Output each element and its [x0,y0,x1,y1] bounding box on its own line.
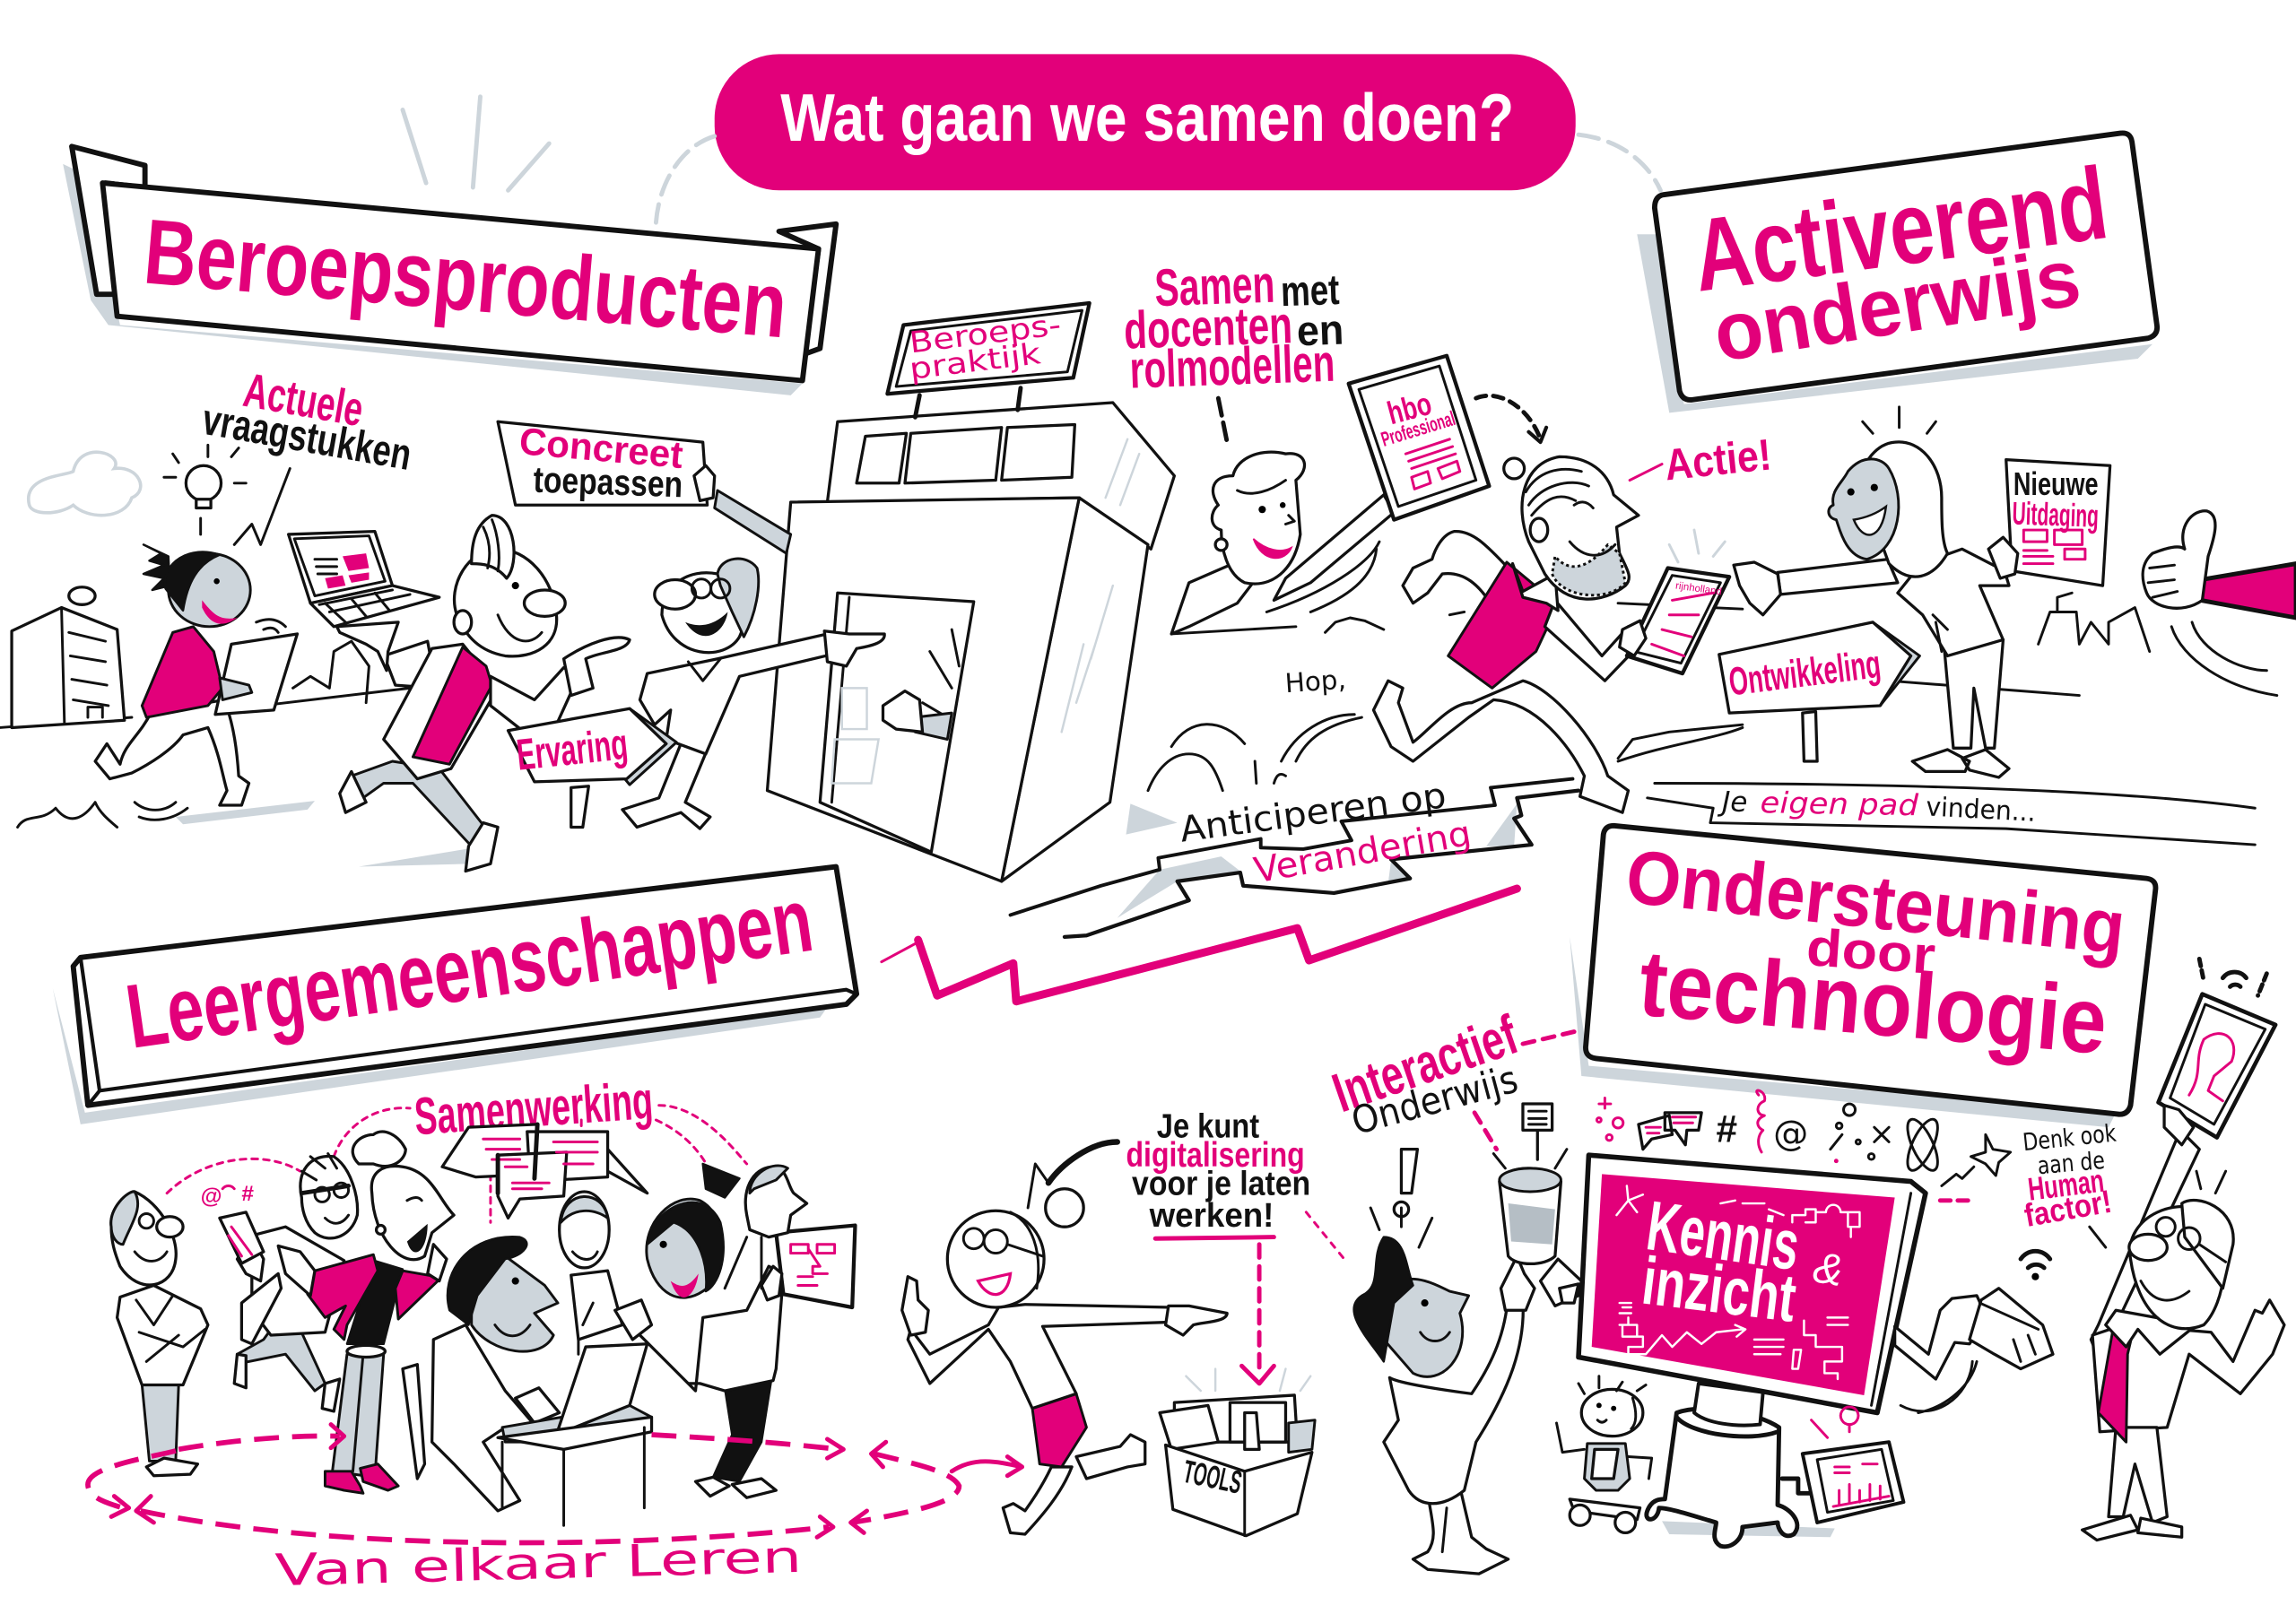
connectors from title [403,97,1660,222]
poster: Nieuwe Uitdaging: Nieuwe [2013,465,2099,502]
text: Samen met docenten en rolmodellen: Samen [1153,256,1275,317]
character: man in background [560,1192,622,1354]
character: seated man with laptop [403,1237,652,1525]
character: woman with bun and tablet [615,1164,855,1497]
icons above monitor: # [1716,1107,1737,1150]
sign: Beroepspraktijk: praktijk [908,336,1042,386]
character: man carrying laptop [289,516,630,871]
tablet: hbo Professional: hbo [1383,385,1435,431]
character: man with phone [201,1154,358,1411]
ground lines [0,603,2079,867]
path: Je eigen pad vinden: eigen pad [1760,785,1919,822]
cloud [29,452,141,516]
dashed ring [88,1425,1022,1543]
text: Je kunt digitalisering [1126,1107,1344,1384]
signpost: Ervaring [509,708,676,827]
monitor: Kennis en inzicht: Kennis [1642,1185,1804,1285]
path: Je eigen pad vinden: vinden... [1926,791,2037,828]
signpost: Ontwikkeling [1719,622,1919,761]
speech bubbles [442,1124,648,1218]
text: Actuele vraagstukken [199,363,415,480]
heading box: Leergemeenschappen: Leergemeenschappen [120,869,819,1068]
lightning line [882,889,1517,1002]
character: running man in pink vest: rijnholland [1674,580,1723,598]
text: Denk ook aan de Human factor: aan de [2037,1147,2106,1180]
text: Denk ook aan de Human factor: factor! [2022,1183,2114,1234]
character: running woman with tablet [18,544,297,827]
character: man with phone: @ [201,1185,222,1209]
text: Samen met docenten en rolmodellen: rolmodellen [1129,334,1335,400]
character: teacher with tablet [1171,452,1394,634]
icons above monitor: @ [1773,1114,1808,1154]
character: woman in hijab [1734,407,2009,777]
text: Je kunt digitalisering: voor je laten [1132,1164,1310,1202]
heading box: Leergemeenschappen [53,867,857,1124]
character: man with phone: # [241,1182,254,1206]
banner: Anticiperen op Verandering: Anticiperen op [1178,776,1448,851]
text: Samen met docenten en rolmodellen [1123,256,1344,442]
poster: Nieuwe Uitdaging [1988,460,2110,586]
monitor stand [1647,1384,1835,1547]
smart speaker [1493,1104,1581,1306]
sign: Concreet toepassen [498,420,791,553]
monitor: Kennis en inzicht [1578,1155,1926,1413]
tablet: hbo Professional: Professional [1378,406,1458,451]
tablet raised with head [2159,959,2275,1145]
text: Denk ook aan de Human factor [2022,1119,2118,1234]
toolbox [1160,1369,1315,1536]
heading box: Activerend onderwijs: Activerend [1687,146,2114,314]
text: Interactief Onderwijs [1326,1004,1578,1150]
character: man pointing at door [622,559,884,829]
text: Interactief Onderwijs: Interactief [1326,1004,1526,1124]
robot [1557,1376,1652,1532]
text: Samenwerking [167,1072,747,1222]
heading box: Ondersteuning door technologie [1570,826,2155,1127]
sketch: house outline [293,641,369,703]
sign: Beroepspraktijk [887,303,1090,417]
signpost: Ervaring: Ervaring [514,720,631,780]
text: Actuele vraagstukken: Actuele [239,363,368,437]
text: Samenwerking: Samenwerking [413,1072,655,1146]
heading banner: Beroepsproducten: Beroepsproducten [140,199,791,357]
character: man with smart speaker [1354,1150,1535,1574]
text: Samen met docenten en rolmodellen: docenten [1123,296,1293,360]
heading box: Ondersteuning door technologie: technologie [1635,931,2111,1074]
toolbox: TOOLS [1180,1453,1245,1501]
character: man behind right [725,1166,807,1289]
text: Samen met docenten en rolmodellen: en [1296,307,1344,355]
sign: Concreet toepassen: toepassen [533,459,683,505]
text: Denk ook aan de Human factor: Human [2026,1162,2106,1208]
icon: light bulb [164,445,290,544]
path: Je eigen pad vinden: Je [1717,785,1748,819]
character: man arms crossed [111,1192,208,1476]
text: Je kunt digitalisering: Je kunt [1157,1107,1260,1145]
text: Van elkaar Leren: Van elkaar Leren [274,1532,803,1596]
character: running man in pink vest [1373,456,1729,812]
heading box: Ondersteuning door technologie: door [1805,918,1937,985]
icons above monitor [1596,1090,2011,1201]
arrow: tablet to runner [1476,395,1546,442]
text: Hop and jump arcs [1148,664,1361,791]
heading box: Activerend onderwijs: onderwijs [1708,231,2086,379]
poster: Nieuwe Uitdaging: Uitdaging [2012,495,2100,534]
text: Samen met docenten en rolmodellen: met [1280,266,1340,316]
path: Je eigen pad vinden [1618,725,2255,845]
tablet with chart [1803,1407,1903,1523]
character: woman in pink jacket [278,1132,454,1493]
heading box: Activerend onderwijs [1637,133,2157,412]
banner: Anticiperen op Verandering: Verandering [1251,814,1474,891]
heading banner: Beroepsproducten [63,146,836,395]
building: beroepspraktijk [768,403,1178,881]
sign: Concreet toepassen: Concreet [517,420,684,476]
tablet: hbo Professional [1349,356,1489,520]
heading box: Ondersteuning door technologie: Ondersteuning [1622,833,2129,970]
building: left [12,587,125,727]
text: Je kunt digitalisering: werken! [1149,1196,1274,1234]
banner: Anticiperen op Verandering [1011,776,1578,937]
signpost: Ontwikkeling: Ontwikkeling [1726,642,1883,704]
text: Interactief Onderwijs: Onderwijs [1347,1058,1523,1144]
character: VR headset arm [1560,1251,2053,1413]
sign: Beroepspraktijk: Beroeps- [908,308,1063,360]
character: woman pointing [902,1141,1227,1534]
text: Actie [1630,430,1774,490]
text: Actie: Actie! [1662,430,1774,490]
hand: thumbs up [2143,511,2296,696]
monitor: Kennis en inzicht: inzicht [1639,1243,1800,1336]
monitor: Kennis en inzicht: & [1810,1243,1847,1296]
text: Actuele vraagstukken: vraagstukken [199,395,415,480]
character: man in tie with raised tablet [2083,1130,2284,1541]
city skyline [1326,593,2150,652]
text: Je kunt digitalisering: digitalisering [1126,1136,1305,1175]
title pill: Wat gaan we samen doen? [780,80,1514,155]
text: Denk ook aan de Human factor: Denk ook [2022,1119,2118,1157]
title pill [715,54,1576,190]
text: Hop and jump arcs: Hop, [1284,664,1347,699]
